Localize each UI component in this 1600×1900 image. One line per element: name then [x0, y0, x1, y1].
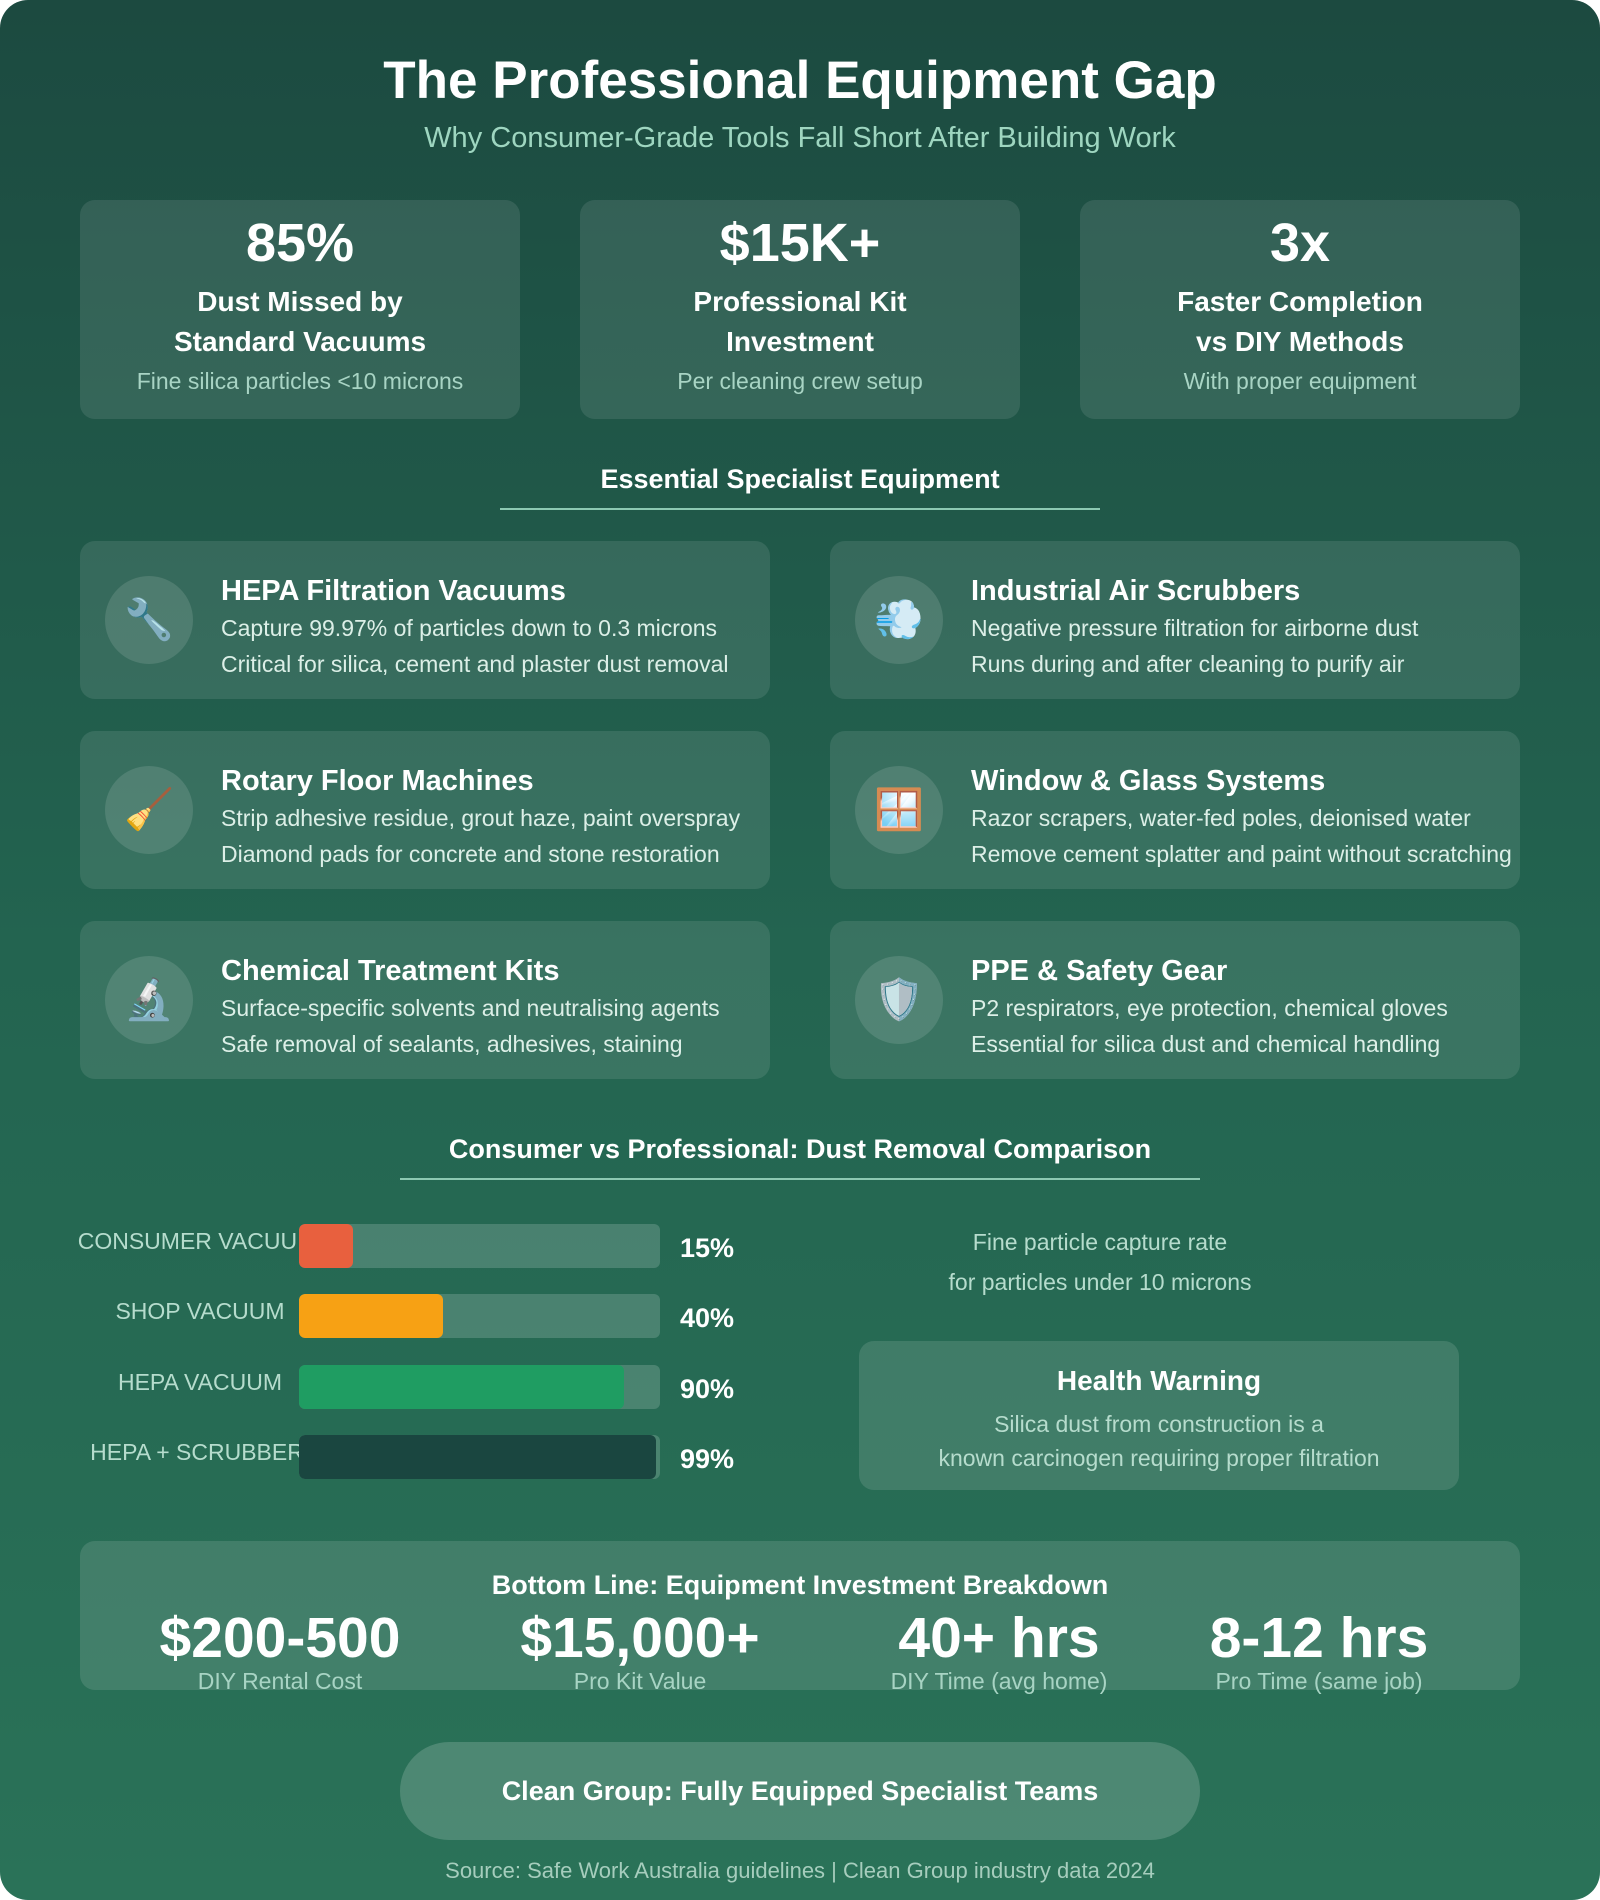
- panel: bottom line: 40+ hrs: [898, 1606, 1100, 1670]
- panel: air scrubbers: Industrial Air Scrubbers: [971, 575, 1300, 607]
- panel: HEPA vacuums: Capture 99.97% of particles down to 0.3 microns: [221, 615, 717, 641]
- stat card: 85%: [80, 200, 520, 419]
- panel: bottom line: $15,000+: [520, 1606, 760, 1670]
- panel: PPE: P2 respirators, eye protection, chemical gloves: [971, 995, 1448, 1021]
- bar chart: 99%: [680, 1444, 734, 1474]
- stat card: $15K+: [580, 200, 1020, 419]
- stat card: 85%: Fine silica particles <10 microns: [137, 368, 463, 394]
- panel: air scrubbers: [830, 541, 1520, 699]
- panel: bottom line: [80, 1541, 1520, 1690]
- panel: air scrubbers: 💨: [874, 598, 924, 642]
- panel: PPE: [830, 921, 1520, 1079]
- panel: rotary floor machines: Diamond pads for concrete and stone restoration: [221, 841, 720, 867]
- panel: chemical kits: Chemical Treatment Kits: [221, 955, 559, 987]
- panel: air scrubbers: Negative pressure filtration for airborne dust: [971, 615, 1418, 641]
- callout: CTA pill: [400, 1742, 1200, 1840]
- panel: bottom line: DIY Rental Cost: [198, 1668, 362, 1694]
- bar chart: CONSUMER VACUUM: [78, 1228, 316, 1254]
- panel: window systems: Razor scrapers, water-fed poles, deionised water: [971, 805, 1471, 831]
- panel: chemical kits: 🔬: [124, 978, 174, 1022]
- bar chart: 40%: [680, 1303, 734, 1333]
- bar chart: SHOP VACUUM: [115, 1298, 285, 1324]
- title: The Professional Equipment Gap: [383, 51, 1217, 110]
- panel: PPE: PPE & Safety Gear: [971, 955, 1227, 987]
- bar chart: [78, 1224, 734, 1479]
- panel: bottom line: Bottom Line: Equipment Investment Breakdown: [492, 1570, 1108, 1600]
- callout: health warning: known carcinogen requiring proper filtration: [938, 1445, 1380, 1471]
- panel: air scrubbers: Runs during and after cleaning to purify air: [971, 651, 1404, 677]
- bar chart: 15%: [680, 1233, 734, 1263]
- chart caption: for particles under 10 microns: [949, 1269, 1251, 1295]
- stat card: 3x: vs DIY Methods: [1196, 326, 1404, 357]
- stat card: $15K+: Per cleaning crew setup: [677, 368, 923, 394]
- panel: window systems: [830, 731, 1520, 889]
- bar chart: HEPA + SCRUBBER: [90, 1439, 304, 1465]
- heading: comparison: Consumer vs Professional: Dust Removal Comparison: [449, 1134, 1151, 1164]
- stat card: 85%: Dust Missed by: [197, 286, 403, 317]
- panel: bottom line: Pro Time (same job): [1215, 1668, 1423, 1694]
- panel: HEPA vacuums: Critical for silica, cement and plaster dust removal: [221, 651, 728, 677]
- stat card: 3x: 3x: [1270, 213, 1330, 273]
- panel: HEPA vacuums: 🔧: [124, 598, 174, 642]
- callout: health warning: Health Warning: [1057, 1365, 1261, 1396]
- stat card: 3x: With proper equipment: [1184, 368, 1416, 394]
- panel: chemical kits: Safe removal of sealants, adhesives, staining: [221, 1031, 683, 1057]
- bar chart: 90%: [680, 1374, 734, 1404]
- panel: HEPA vacuums: [80, 541, 770, 699]
- heading: essential equipment: Essential Specialist Equipment: [600, 464, 1000, 494]
- chart caption: Fine particle capture rate: [973, 1229, 1227, 1255]
- stat card: 3x: Faster Completion: [1177, 286, 1423, 317]
- panel: window systems: Window & Glass Systems: [971, 765, 1325, 797]
- panel: rotary floor machines: [80, 731, 770, 889]
- panel: bottom line: $200-500: [160, 1606, 400, 1670]
- panel: window systems: Remove cement splatter and paint without scratching: [971, 841, 1512, 867]
- panel: rotary floor machines: Rotary Floor Machines: [221, 765, 534, 797]
- stat card: $15K+: Investment: [726, 326, 874, 357]
- callout: health warning: [859, 1341, 1459, 1490]
- panel: chemical kits: [80, 921, 770, 1079]
- panel: chemical kits: Surface-specific solvents and neutralising agents: [221, 995, 720, 1021]
- panel: rotary floor machines: 🧹: [124, 788, 174, 832]
- panel: rotary floor machines: Strip adhesive residue, grout haze, paint overspray: [221, 805, 740, 831]
- stat card: $15K+: Professional Kit: [693, 286, 907, 317]
- callout: health warning: Silica dust from construction is a: [994, 1411, 1324, 1437]
- stat card: $15K+: $15K+: [720, 213, 880, 273]
- callout: CTA pill: Clean Group: Fully Equipped Specialist Teams: [502, 1776, 1098, 1806]
- stat card: 3x: [1080, 200, 1520, 419]
- bar chart: HEPA VACUUM: [118, 1369, 282, 1395]
- stat card: 85%: Standard Vacuums: [174, 326, 426, 357]
- panel: bottom line: 8-12 hrs: [1210, 1606, 1428, 1670]
- panel: PPE: Essential for silica dust and chemical handling: [971, 1031, 1440, 1057]
- panel: PPE: 🛡️: [874, 978, 924, 1022]
- stat card: 85%: 85%: [246, 213, 354, 273]
- subtitle: Why Consumer-Grade Tools Fall Short After Building Work: [424, 122, 1176, 154]
- panel: HEPA vacuums: HEPA Filtration Vacuums: [221, 575, 566, 607]
- chart caption: [948, 1229, 1251, 1295]
- source: Source: Safe Work Australia guidelines | Clean Group industry data 2024: [445, 1858, 1155, 1883]
- panel: window systems: 🪟: [874, 788, 924, 832]
- panel: bottom line: Pro Kit Value: [574, 1668, 706, 1694]
- panel: bottom line: DIY Time (avg home): [891, 1668, 1107, 1694]
